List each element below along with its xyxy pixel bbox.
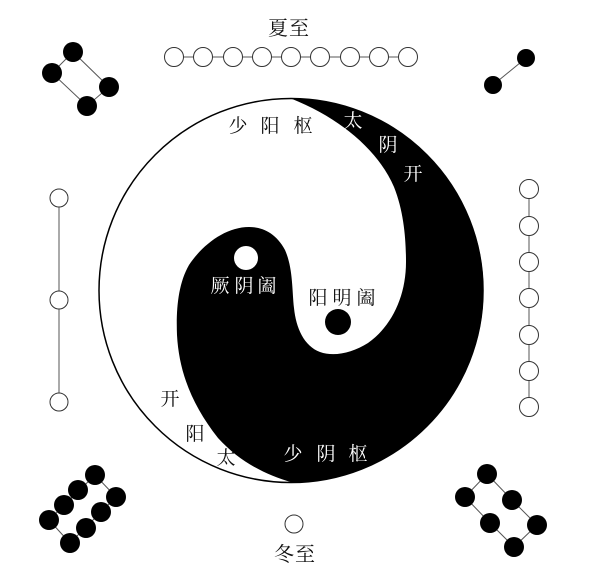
black fish xyxy=(177,98,484,482)
label: taiyin open: 开 xyxy=(403,163,423,185)
label: taiyin open: 阴 xyxy=(378,134,398,156)
chain: nine open circles xyxy=(164,48,418,66)
outer circle xyxy=(99,98,483,482)
label: yangming close xyxy=(308,287,376,309)
taiji diagram xyxy=(99,98,484,482)
label: taiyin open xyxy=(343,110,423,185)
label: jueyin close xyxy=(210,275,277,297)
chain: three open circles, left xyxy=(50,189,68,411)
label: shaoyin pivot: 阴 xyxy=(316,443,336,465)
label: jueyin close: 阴 xyxy=(234,275,254,297)
label: taiyang open: 太 xyxy=(216,447,236,469)
label: shaoyang pivot: 少 xyxy=(228,115,248,137)
label: yangming close: 阖 xyxy=(356,287,376,309)
white dot xyxy=(234,246,258,270)
label: shaoyin pivot xyxy=(283,443,368,465)
title: summer solstice: 夏至 xyxy=(268,17,310,40)
label: shaoyang pivot: 枢 xyxy=(293,115,313,137)
label: shaoyin pivot: 枢 xyxy=(348,443,368,465)
label: yangming close: 明 xyxy=(332,287,352,309)
label: shaoyang pivot xyxy=(228,115,313,137)
icon: four black dots, top left xyxy=(42,42,119,116)
label: shaoyin pivot: 少 xyxy=(283,443,303,465)
title: winter solstice: 冬至 xyxy=(274,543,316,566)
icon: single open circle xyxy=(285,515,303,533)
label: taiyin open: 太 xyxy=(343,110,363,132)
chain: seven open circles, right xyxy=(520,180,538,416)
label: jueyin close: 厥 xyxy=(210,275,230,297)
label: yangming close: 阳 xyxy=(308,287,328,309)
icon: two black dots, top right xyxy=(484,49,535,94)
label: shaoyang pivot: 阳 xyxy=(260,115,280,137)
icon: six black dots, bottom right xyxy=(455,464,547,557)
icon: eight black dots, bottom left xyxy=(39,465,126,553)
black dot xyxy=(325,309,351,335)
label: taiyang open xyxy=(160,388,236,469)
label: jueyin close: 阖 xyxy=(257,275,277,297)
label: taiyang open: 阳 xyxy=(185,423,205,445)
label: taiyang open: 开 xyxy=(160,388,180,410)
